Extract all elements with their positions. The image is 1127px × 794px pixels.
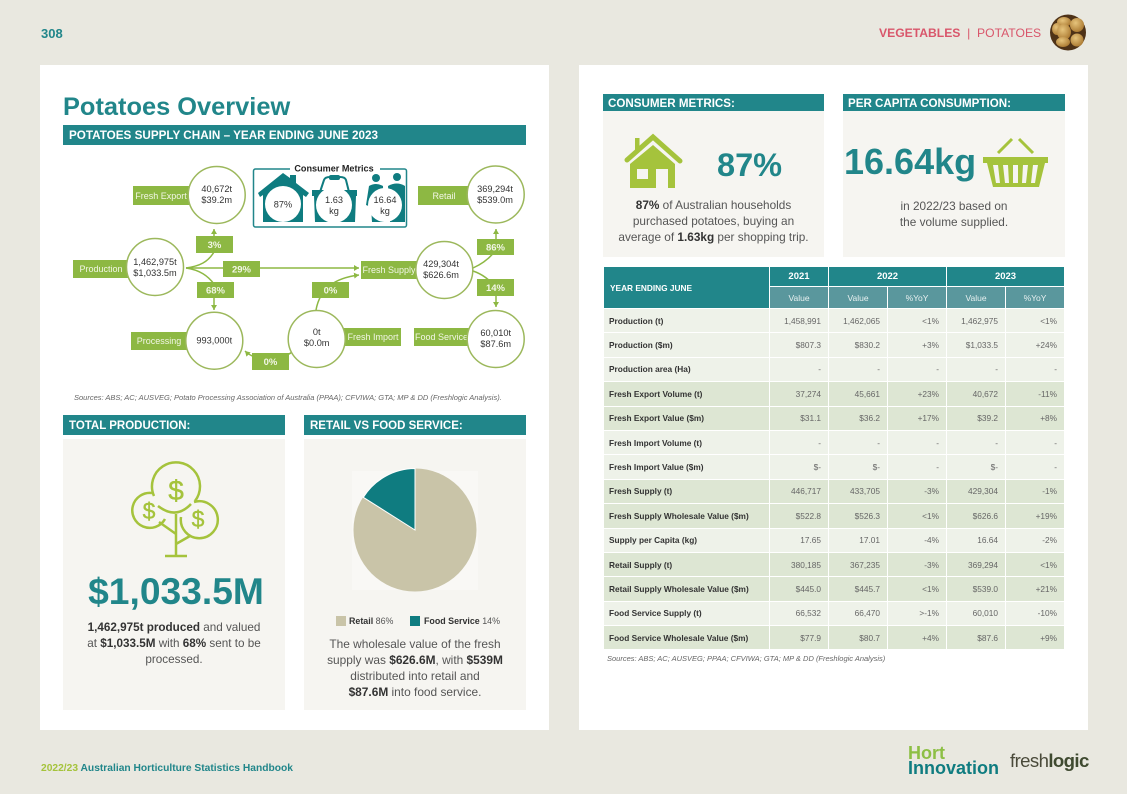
chart: pie xyxy=(354,468,476,592)
consumer metrics box xyxy=(254,162,406,227)
table: potato statistics: 1,462,065 xyxy=(843,316,880,326)
text block: 87% of Australian households xyxy=(636,198,791,212)
table: potato statistics: - xyxy=(936,438,939,448)
table: potato statistics: <1% xyxy=(1040,316,1057,326)
table: potato statistics: -3% xyxy=(924,486,939,496)
icon: money tree: $ xyxy=(192,506,205,532)
logo: hort innovation xyxy=(908,743,999,778)
percent tags xyxy=(196,236,514,370)
heading: consumer metrics: CONSUMER METRICS: xyxy=(608,97,735,110)
logo: hort innovation: Hort xyxy=(908,743,945,763)
heading: per capita xyxy=(843,94,1065,111)
table: potato statistics: +8% xyxy=(1040,413,1057,423)
footer title: 2022/23 Australian Horticulture Statistics Handbook xyxy=(41,763,293,774)
text block xyxy=(900,199,1008,229)
node: fresh import: $0.0m xyxy=(304,338,330,348)
table: potato statistics: Food Service Wholesale Value ($m) xyxy=(609,633,748,643)
node: retail xyxy=(418,166,524,223)
table: potato statistics: Value xyxy=(788,292,810,302)
table: potato statistics: +3% xyxy=(922,340,939,350)
node: processing: Processing xyxy=(137,336,181,346)
legend: Food Service 14% xyxy=(424,616,500,626)
panel: per capita xyxy=(843,111,1065,257)
node: food service: $87.6m xyxy=(480,339,511,349)
table: potato statistics: - xyxy=(1054,364,1057,374)
table: potato statistics: - xyxy=(877,364,880,374)
node: food service: Food Service xyxy=(415,332,468,342)
node: fresh supply: $626.6m xyxy=(423,270,459,280)
table: potato statistics: 2022 xyxy=(877,271,898,282)
table: potato statistics: $- xyxy=(814,462,821,472)
table: potato statistics: 369,294 xyxy=(968,560,998,570)
icon: money tree xyxy=(131,461,220,558)
heading: retail vs food service xyxy=(304,415,526,435)
table: potato statistics: Value xyxy=(965,292,987,302)
icon: people metric: kg xyxy=(380,206,390,216)
table: potato statistics: $77.9 xyxy=(800,633,821,643)
table: potato statistics: - xyxy=(818,438,821,448)
table: potato statistics: Fresh Import Volume (t) xyxy=(609,438,702,448)
table: potato statistics: - xyxy=(877,438,880,448)
table: potato statistics: $- xyxy=(873,462,880,472)
heading: total production: TOTAL PRODUCTION: xyxy=(69,420,190,432)
sources: table: Sources: ABS; AC; AUSVEG; PPAA; CFVIWA; GTA; MP & DD (Freshlogic Analysis) xyxy=(607,654,885,663)
consumer metrics box: Consumer Metrics xyxy=(294,164,374,174)
percent tags: 0% xyxy=(324,286,338,296)
table: potato statistics: Retail Supply (t) xyxy=(609,560,672,570)
percent tags: 0% xyxy=(264,357,278,368)
table: potato statistics: $- xyxy=(991,462,998,472)
table: potato statistics: Production (t) xyxy=(609,316,663,326)
icon: house metric: 87% xyxy=(274,200,292,210)
node: fresh supply: 429,304t xyxy=(423,259,459,269)
text block xyxy=(327,637,503,699)
sources: supply chain: Sources: ABS; AC; AUSVEG; Potato Processing Association of Australia (PPAA); CFVIWA; GTA; MP & DD (Freshlogic Analysis). xyxy=(74,393,502,402)
table: potato statistics: 16.64 xyxy=(977,535,998,545)
table: potato statistics: $36.2 xyxy=(859,413,880,423)
panel: retail vs food service xyxy=(304,439,526,710)
text block: The wholesale value of the fresh xyxy=(329,637,501,651)
table: potato statistics: $445.0 xyxy=(796,584,821,594)
node: fresh export: $39.2m xyxy=(201,195,232,205)
table: potato statistics: Production area (Ha) xyxy=(609,364,691,374)
table: potato statistics: Production ($m) xyxy=(609,340,673,350)
table: potato statistics: $87.6 xyxy=(977,633,998,643)
table: potato statistics: -11% xyxy=(1038,389,1057,399)
legend: Retail 86% xyxy=(349,616,393,626)
table: potato statistics: 429,304 xyxy=(968,486,998,496)
percent tags: 68% xyxy=(206,286,226,296)
table: potato statistics: - xyxy=(936,462,939,472)
heading: supply chain xyxy=(63,125,526,145)
icon: people metric xyxy=(366,173,405,222)
table: potato statistics: 1,462,975 xyxy=(961,316,998,326)
table: potato statistics: -2% xyxy=(1042,535,1057,545)
table: potato statistics: Value xyxy=(847,292,869,302)
node: retail: $539.0m xyxy=(477,195,513,205)
node: production: Production xyxy=(79,264,123,274)
text block xyxy=(618,198,809,244)
table: potato statistics: 433,705 xyxy=(850,486,880,496)
table: potato statistics: +4% xyxy=(922,633,939,643)
node: fresh import xyxy=(288,310,401,368)
icon: basket metric: kg xyxy=(329,206,339,216)
table: potato statistics: $445.7 xyxy=(855,584,880,594)
table: potato statistics: Retail Supply Wholesale Value ($m) xyxy=(609,584,749,594)
node: retail: 369,294t xyxy=(477,184,513,194)
table: potato statistics: +23% xyxy=(918,389,939,399)
table: potato statistics: - xyxy=(936,364,939,374)
table: potato statistics: - xyxy=(1054,438,1057,448)
node: food service: 60,010t xyxy=(480,328,511,338)
table: potato statistics: 2021 xyxy=(788,271,810,282)
text block: $87.6M into food service. xyxy=(349,685,481,699)
table: potato statistics: 60,010 xyxy=(973,608,998,618)
table: potato statistics: Fresh Export Value ($m) xyxy=(609,413,704,423)
node: fresh export: Fresh Export xyxy=(135,191,187,201)
node: processing xyxy=(131,312,243,369)
table: potato statistics: %YoY xyxy=(1024,292,1046,302)
logo: freshlogic: freshlogic xyxy=(1010,750,1089,771)
table: potato statistics: $830.2 xyxy=(855,340,880,350)
table: potato statistics: 37,274 xyxy=(796,389,821,399)
node: food service xyxy=(414,310,524,368)
legend xyxy=(336,616,500,626)
metric: 87%: 87% xyxy=(717,147,782,183)
table: potato statistics: $1,033.5 xyxy=(966,340,998,350)
percent tags: 29% xyxy=(232,264,252,276)
heading: total production xyxy=(63,415,285,435)
node: fresh supply xyxy=(361,242,473,298)
table: potato statistics: $31.1 xyxy=(800,413,821,423)
text block: purchased potatoes, buying an xyxy=(633,214,794,228)
table: potato statistics: $80.7 xyxy=(859,633,880,643)
table: potato statistics: - xyxy=(818,364,821,374)
table: potato statistics: 367,235 xyxy=(850,560,880,570)
table: potato statistics: $807.3 xyxy=(796,340,821,350)
node: production: 1,462,975t xyxy=(133,257,177,267)
table: potato statistics: +19% xyxy=(1036,511,1057,521)
text block: at $1,033.5M with 68% sent to be xyxy=(87,637,261,650)
table: potato statistics: 17.01 xyxy=(859,535,880,545)
percent tags: 14% xyxy=(486,283,506,294)
table: potato statistics: 66,470 xyxy=(855,608,880,618)
table: potato statistics: <1% xyxy=(922,316,939,326)
icon: money tree: $ xyxy=(168,475,184,506)
table: potato statistics: <1% xyxy=(922,511,939,521)
node: retail: Retail xyxy=(432,191,456,201)
title: Potatoes Overview xyxy=(63,93,290,121)
table: potato statistics xyxy=(604,267,1064,649)
table: potato statistics: 2023 xyxy=(995,271,1016,282)
table: potato statistics: <1% xyxy=(922,584,939,594)
node: fresh export: 40,672t xyxy=(201,184,232,194)
text block: 1,462,975t produced and valued xyxy=(88,621,260,634)
node: fresh import: Fresh Import xyxy=(347,332,399,342)
section heading: vegetables potatoes: VEGETABLES | POTATOES xyxy=(879,26,1041,40)
table: potato statistics: %YoY xyxy=(906,292,928,302)
node: fresh export xyxy=(133,166,245,224)
panel: consumer metrics xyxy=(603,111,824,257)
table: potato statistics: +17% xyxy=(918,413,939,423)
text block: distributed into retail and xyxy=(350,669,480,683)
percent tags: 3% xyxy=(208,240,222,251)
table: potato statistics: 380,185 xyxy=(791,560,821,570)
table: potato statistics: - xyxy=(1054,462,1057,472)
icon: basket metric: 1.63 xyxy=(325,195,343,205)
node: production: $1,033.5m xyxy=(133,268,177,278)
logo: hort innovation: Innovation xyxy=(908,758,999,778)
table: potato statistics: +21% xyxy=(1036,584,1057,594)
icon: house metric xyxy=(258,173,309,222)
heading: retail vs food service: RETAIL VS FOOD SERVICE: xyxy=(310,420,463,432)
table: potato statistics: Fresh Export Volume (t) xyxy=(609,389,702,399)
page number: 308 xyxy=(41,26,63,41)
table: potato statistics: <1% xyxy=(1040,560,1057,570)
table: potato statistics: 446,717 xyxy=(791,486,821,496)
icon: basket metric xyxy=(312,175,357,223)
table: potato statistics: $526.3 xyxy=(855,511,880,521)
metric: 16.64kg: 16.64kg xyxy=(844,141,976,182)
node: production xyxy=(73,238,184,296)
table: potato statistics: YEAR ENDING JUNE xyxy=(610,282,692,292)
icon: people metric: 16.64 xyxy=(374,195,396,205)
panel: right page xyxy=(579,65,1088,730)
text block: in 2022/23 based on xyxy=(901,199,1007,213)
big number: $1,033.5M xyxy=(88,570,264,612)
table: potato statistics: -10% xyxy=(1038,608,1057,618)
table: potato statistics: $539.0 xyxy=(973,584,998,594)
table: potato statistics: 66,532 xyxy=(796,608,821,618)
icon: potatoes photo xyxy=(1050,14,1086,50)
text block xyxy=(87,621,261,666)
table: potato statistics: 1,458,991 xyxy=(784,316,821,326)
node: fresh import: 0t xyxy=(313,327,321,337)
chart: supply chain diagram xyxy=(73,164,525,370)
table: potato statistics: - xyxy=(995,438,998,448)
icon: house xyxy=(624,134,682,188)
table: potato statistics: $39.2 xyxy=(977,413,998,423)
text block: supply was $626.6M, with $539M xyxy=(327,653,503,667)
table: potato statistics: Food Service Supply (t) xyxy=(609,608,702,618)
table: potato statistics: >-1% xyxy=(919,608,939,618)
table: potato statistics: 17.65 xyxy=(800,535,821,545)
table: potato statistics: $626.6 xyxy=(973,511,998,521)
icon: money tree: $ xyxy=(143,498,156,524)
table: potato statistics: 40,672 xyxy=(973,389,998,399)
table: potato statistics: - xyxy=(995,364,998,374)
table: potato statistics: +9% xyxy=(1040,633,1057,643)
text block: average of 1.63kg per shopping trip. xyxy=(618,230,809,244)
heading: per capita: PER CAPITA CONSUMPTION: xyxy=(848,97,1011,110)
table: potato statistics: -4% xyxy=(924,535,939,545)
text block: the volume supplied. xyxy=(900,215,1008,229)
node: fresh supply: Fresh Supply xyxy=(362,265,416,275)
node: processing: 993,000t xyxy=(196,336,233,346)
panel: left page xyxy=(40,65,549,730)
table: potato statistics: $522.8 xyxy=(796,511,821,521)
arrows: flows xyxy=(186,229,496,359)
table: potato statistics: -1% xyxy=(1042,486,1057,496)
table: potato statistics: +24% xyxy=(1036,340,1057,350)
text block: processed. xyxy=(145,653,203,666)
icon: basket xyxy=(983,138,1048,187)
table: potato statistics: 45,661 xyxy=(855,389,880,399)
percent tags: 86% xyxy=(486,242,506,254)
heading: consumer metrics xyxy=(603,94,824,111)
table: potato statistics: Fresh Supply Wholesale Value ($m) xyxy=(609,511,749,521)
table: potato statistics: -3% xyxy=(924,560,939,570)
panel: total production xyxy=(63,439,285,710)
table: potato statistics: Fresh Supply (t) xyxy=(609,486,672,496)
table: potato statistics: Supply per Capita (kg) xyxy=(609,535,697,545)
heading: supply chain: POTATOES SUPPLY CHAIN – YEAR ENDING JUNE 2023 xyxy=(69,129,378,142)
table: potato statistics: Fresh Import Value ($m) xyxy=(609,462,704,472)
